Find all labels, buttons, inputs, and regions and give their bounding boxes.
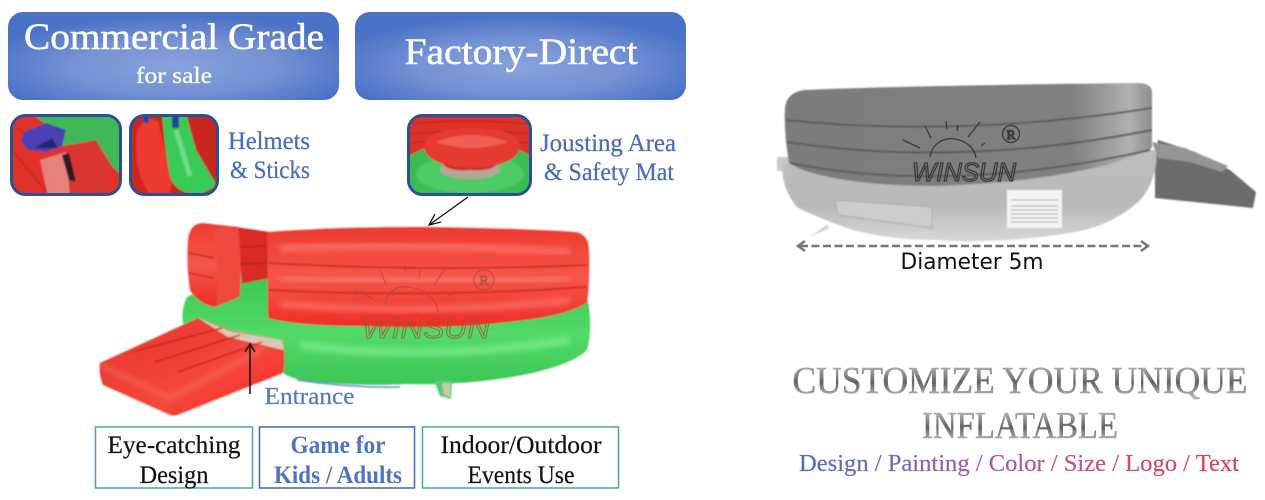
watermark: WINSUN logo: R (479, 274, 489, 289)
watermark: WINSUN logo grey (903, 121, 1020, 187)
dimension arrow: diameter (798, 241, 1148, 251)
label: Helmets & Sticks: Helmets (228, 128, 310, 155)
watermark: WINSUN logo (354, 265, 494, 345)
arrow: to jousting area (429, 197, 468, 225)
label: Jousting Area & Safety Mat: Jousting Area (540, 130, 676, 157)
feature box: Game for Kids / Adults: Kids / Adults (274, 462, 402, 489)
feature box: Indoor/Outdoor Events Use: Indoor/Outdoor (440, 432, 602, 459)
banner: Factory-Direct (355, 12, 686, 100)
inflatable jousting arena (100, 223, 590, 416)
photo: helmets in plastic wrap (10, 114, 122, 196)
label: Diameter 5m: Diameter 5m (900, 250, 1044, 275)
feature box: Eye-catching Design (96, 427, 252, 489)
feature box: Eye-catching Design: Design (140, 462, 209, 489)
customization options line: Design / Painting / Color / Size / Logo / Text (799, 450, 1239, 477)
heading: Customize your unique inflatable (792, 360, 1248, 447)
label: Jousting Area & Safety Mat (540, 130, 676, 186)
banner: Commercial Grade for sale: Commercial Grade (24, 17, 324, 58)
label: Entrance: Entrance (264, 384, 354, 410)
heading: Customize your unique inflatable: INFLATABLE (922, 405, 1118, 447)
feature box: Game for Kids / Adults (260, 427, 414, 489)
feature box: Game for Kids / Adults: Game for (290, 432, 386, 459)
banner: Commercial Grade for sale: for sale (136, 63, 212, 88)
watermark: WINSUN logo grey: WINSUN (912, 157, 1016, 187)
feature box: Indoor/Outdoor Events Use (422, 427, 618, 489)
feature box: Indoor/Outdoor Events Use: Events Use (468, 462, 574, 489)
photo: jousting sticks (129, 114, 219, 196)
arrow: to entrance (245, 344, 255, 394)
banner: Commercial Grade for sale (8, 12, 339, 100)
photo: jousting area and safety mat (407, 114, 532, 196)
label: Helmets & Sticks (228, 128, 310, 184)
watermark: WINSUN logo: WINSUN (362, 312, 490, 345)
banner: Factory-Direct: Factory-Direct (404, 32, 638, 73)
watermark: WINSUN logo grey: R (1007, 127, 1016, 142)
label: Helmets & Sticks: & Sticks (230, 157, 310, 184)
feature box: Eye-catching Design: Eye-catching (108, 432, 241, 459)
label: Jousting Area & Safety Mat: & Safety Mat (544, 159, 674, 186)
greyscale side view of inflatable (777, 83, 1256, 241)
